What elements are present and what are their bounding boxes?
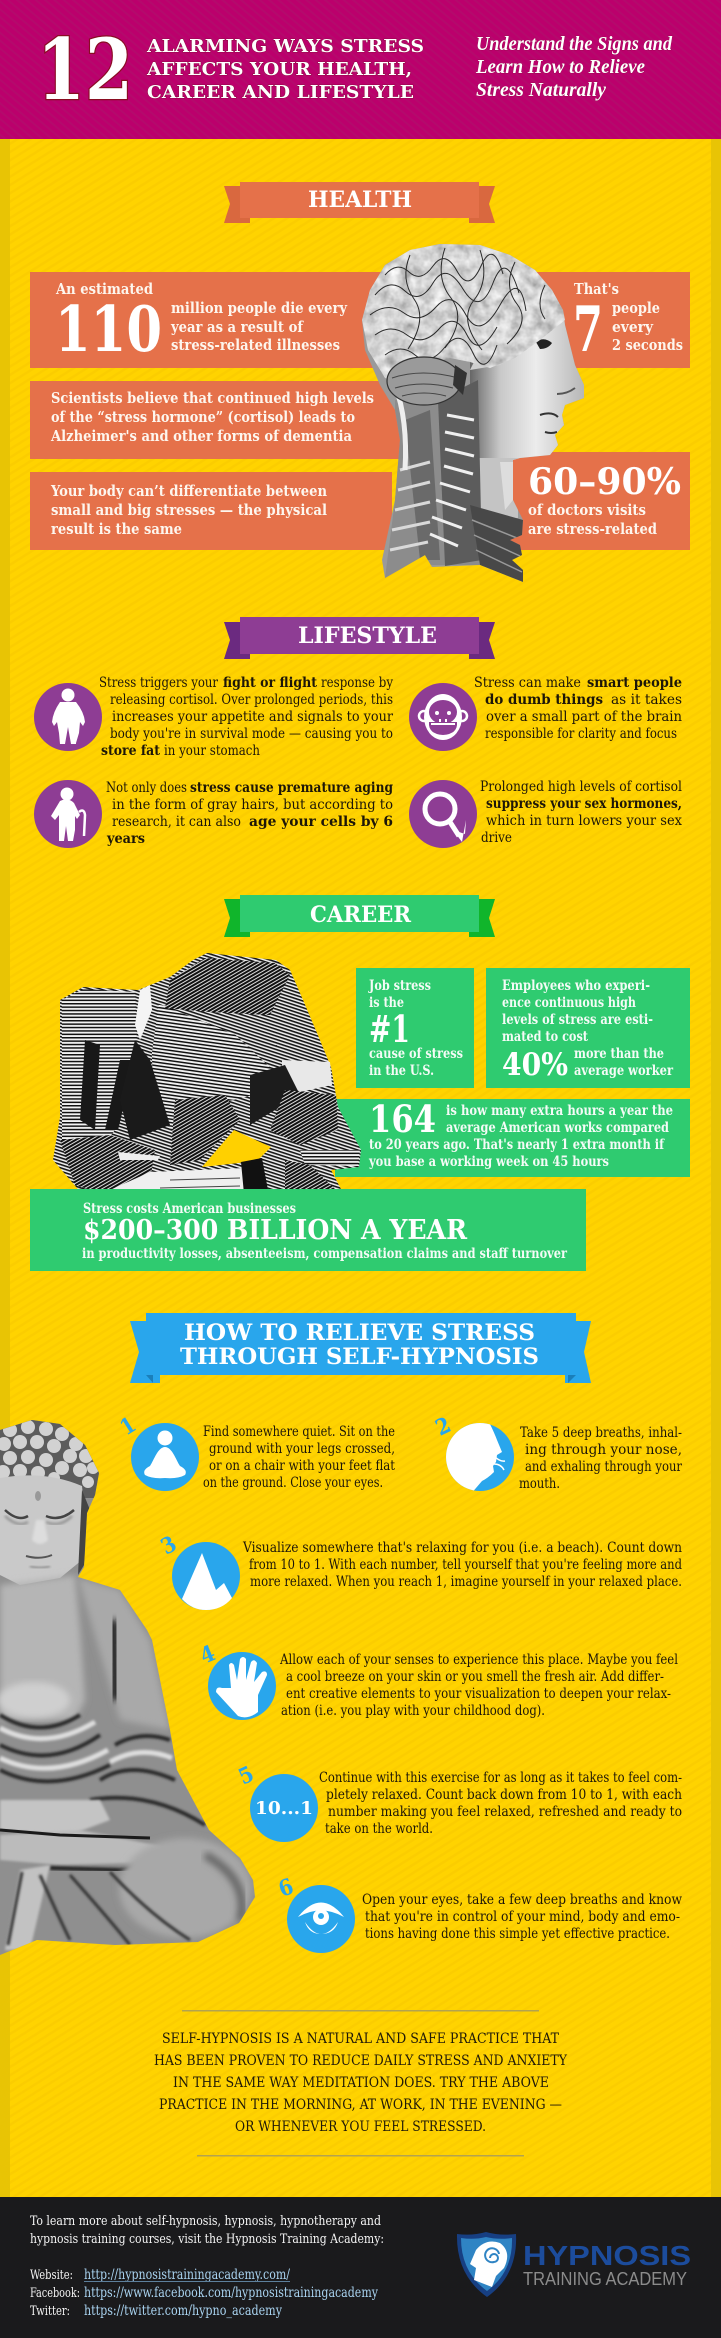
text: pletely relaxed. Count back down from 10 to 1, with each (326, 1787, 682, 1803)
stat: 40%: more than the (574, 1046, 664, 1062)
text: fight or flight: releasing cortisol. Over prolonged periods, this (110, 692, 393, 708)
text: fight or flight: body you're in survival mode — causing you to (110, 726, 393, 742)
stat: 110 million: 110 (55, 292, 162, 366)
title text: CAREER AND LIFESTYLE (147, 82, 414, 103)
icon: countdown: 10...1 (255, 1798, 313, 1819)
text: more relaxed. When you reach 1, imagine yourself in your relaxed place. (250, 1574, 682, 1590)
panel: career stats upper (335, 968, 690, 1177)
text: on the ground. Close your eyes. (203, 1475, 383, 1491)
text: smart people: as it takes (611, 692, 682, 708)
text (203, 1424, 395, 1491)
text: ation (i.e. you play with your childhood dog). (281, 1703, 545, 1719)
header band (0, 0, 721, 139)
title text: ALARMING WAYS STRESS (146, 36, 424, 57)
stat: 40%: average worker (574, 1063, 674, 1079)
text: premature aging: years (106, 831, 145, 847)
panel: health stats (30, 272, 690, 550)
text: differentiate (50, 483, 328, 538)
text: alzheimer's: of the “stress hormone” (cortisol) leads to (51, 409, 355, 426)
text: ground with your legs crossed, (209, 1441, 395, 1457)
text: ing through your nose, (525, 1442, 682, 1458)
number: 2 (432, 1412, 455, 1441)
torso and robe (0, 1575, 85, 1720)
footer links: Twitter: (30, 2304, 70, 2319)
stat: 164 hours: 164 (369, 1097, 436, 1141)
text: fight or flight: store fat (101, 743, 160, 759)
text: fight or flight: response by (321, 675, 393, 691)
text: premature aging: age your cells by 6 (249, 814, 393, 830)
text: fight or flight (99, 675, 393, 759)
number: 5 (235, 1761, 258, 1790)
stat: 164 hours (368, 1097, 673, 1170)
footer links (30, 2267, 378, 2319)
footer intro text (30, 2214, 384, 2247)
title text: AFFECTS YOUR HEALTH, (146, 59, 412, 80)
text: smart people (474, 675, 682, 742)
stat: 7 people: people (612, 300, 660, 317)
ribbon: health: HEALTH (308, 187, 412, 213)
closing statement (154, 2010, 568, 2156)
stat: 7 people: 2 seconds (612, 337, 683, 354)
subtitle: Understand the Signs and (476, 33, 673, 55)
text (519, 1425, 682, 1492)
footer (0, 2197, 721, 2338)
text: ent creative elements to your visualization to deepen your relax- (286, 1686, 671, 1702)
illustration: anatomical head (360, 240, 590, 582)
stat: 40%: mated to cost (502, 1029, 588, 1045)
number: 1 (115, 1412, 141, 1441)
closing statement: IN THE SAME WAY MEDITATION DOES. TRY THE ABOVE (173, 2075, 549, 2091)
footer links: Website: (30, 2268, 73, 2283)
icon: hand (208, 1652, 276, 1720)
panel: annual cost (30, 1189, 586, 1271)
stat: 40%: 40% (502, 1047, 568, 1083)
text: smart people: do dumb things (485, 692, 603, 708)
text (279, 1652, 678, 1719)
text: fight or flight: Stress triggers your (99, 675, 218, 691)
panel: lifestyle items (34, 675, 682, 848)
title number: 12 (37, 20, 133, 119)
stat: 164 hours: is how many extra hours a year the (446, 1103, 673, 1119)
text (362, 1892, 683, 1942)
icon: meditation (131, 1423, 199, 1491)
text: number making you feel relaxed, refreshed and ready to (328, 1804, 682, 1820)
ribbon: how to relieve stress: THROUGH SELF-HYPNOSIS (180, 1344, 539, 1370)
panel: annual cost: in productivity losses, absenteeism, compensation claims and staff turnover (82, 1246, 568, 1262)
step 3 (157, 1531, 682, 1610)
stat: 110 million: stress-related illnesses (171, 337, 340, 354)
text: Find somewhere quiet. Sit on the (203, 1424, 395, 1440)
text: fight or flight: increases your appetite and signals to your (112, 709, 393, 725)
text: fight or flight: in your stomach (164, 743, 260, 759)
hair (0, 1418, 100, 1498)
text (242, 1540, 682, 1590)
ribbon: lifestyle: LIFESTYLE (298, 623, 437, 649)
panel: annual cost: Stress costs American businesses (83, 1201, 296, 1217)
closing statement: HAS BEEN PROVEN TO REDUCE DAILY STRESS AND ANXIETY (154, 2053, 568, 2069)
footer links: Facebook: (30, 2286, 80, 2301)
cerebellum (387, 357, 461, 405)
logo: hypnosis training academy: TRAINING ACADEMY (523, 2269, 687, 2289)
step 4 (197, 1640, 678, 1720)
closing statement: SELF-HYPNOSIS IS A NATURAL AND SAFE PRACTICE THAT (162, 2031, 560, 2047)
text: Allow each of your senses to experience this place. Maybe you feel (279, 1652, 678, 1668)
icon: breathing profile (446, 1423, 514, 1491)
stat: #1 cause: #1 (369, 1007, 410, 1051)
leg (119, 1838, 251, 1938)
ribbon: lifestyle (224, 617, 495, 659)
text: from 10 to 1. With each number, tell yourself that you're feeling more and (249, 1557, 682, 1573)
text: alzheimer's (50, 390, 374, 445)
stat: 40% (502, 978, 674, 1083)
illustration: stressed man at desk (53, 953, 361, 1195)
text: that you're in control of your mind, body and emo- (365, 1909, 680, 1925)
icon: mountains (172, 1542, 240, 1610)
stat: 7 people: 7 (573, 292, 603, 366)
footer intro text: To learn more about self-hypnosis, hypnosis, hypnotherapy and (30, 2214, 381, 2229)
number: 6 (275, 1873, 297, 1903)
icon: monkey (409, 683, 477, 751)
text: premature aging: in the form of gray hairs, but according to (112, 797, 393, 813)
text: sex hormones: drive (481, 830, 512, 846)
text: Continue with this exercise for as long as it takes to feel com- (319, 1770, 682, 1786)
stat: 60-90%: 60–90% (528, 461, 681, 503)
footer links: https://www.facebook.com/hypnosistrainingacademy (84, 2285, 378, 2301)
text: differentiate: result is the same (51, 521, 182, 538)
stat: 110 million: million people die every (171, 300, 347, 317)
text: alzheimer's: Scientists believe that continued high levels (51, 390, 374, 407)
step 1 (115, 1412, 395, 1491)
text: tions having done this simple yet effective practice. (365, 1926, 670, 1942)
text: premature aging: Not only does (106, 780, 187, 796)
stat: 40%: ence continuous high (502, 995, 636, 1011)
subtitle: Learn How to Relieve (475, 56, 645, 78)
stat: 40%: levels of stress are esti- (502, 1012, 653, 1028)
logo: hypnosis training academy: HYPNOSIS (523, 2240, 691, 2271)
ribbon: career: CAREER (310, 902, 412, 928)
step 2 (434, 1418, 682, 1491)
text: sex hormones: Prolonged high levels of cortisol (480, 779, 682, 795)
stat: 110 million: An estimated (55, 281, 153, 298)
step 5 (235, 1761, 682, 1842)
panel: annual cost: $200–300 BILLION A YEAR (83, 1215, 468, 1246)
text: sex hormones: suppress your sex hormones, (486, 796, 682, 812)
text: fight or flight: fight or flight (223, 675, 317, 691)
logo: hypnosis training academy (457, 2232, 691, 2297)
stat: 40%: Employees who experi- (502, 978, 650, 994)
text: and exhaling through your (525, 1459, 682, 1475)
text: Visualize somewhere that's relaxing for you (i.e. a beach). Count down (242, 1540, 682, 1556)
stat: 7 people (573, 281, 683, 366)
text: a cool breeze on your skin or you smell the fresh air. Add differ- (286, 1669, 664, 1685)
text: Open your eyes, take a few deep breaths and know (362, 1892, 683, 1908)
step 6 (275, 1873, 683, 1953)
text: sex hormones: which in turn lowers your sex (486, 813, 682, 829)
text: differentiate: Your body can’t differentiate between (50, 483, 328, 500)
text (319, 1770, 682, 1837)
stat: #1 cause: cause of stress (369, 1046, 463, 1062)
text: mouth. (519, 1476, 560, 1492)
footer links: https://twitter.com/hypno_academy (84, 2303, 282, 2319)
text: differentiate: small and big stresses — the physical (51, 502, 327, 519)
stat: 7 people: That's (574, 281, 619, 298)
text: premature aging: stress cause premature aging (190, 780, 394, 796)
stat: #1 cause (368, 978, 463, 1079)
subtitle (475, 33, 673, 101)
stat: 60-90%: of doctors visits (528, 502, 646, 519)
text: smart people: over a small part of the brain (486, 709, 682, 725)
stat: #1 cause: in the U.S. (369, 1063, 434, 1079)
icon: hormone symbol (409, 780, 477, 848)
icon: countdown (250, 1774, 318, 1842)
gap under arm (202, 1130, 271, 1167)
text: take on the world. (325, 1821, 433, 1837)
stat: #1 cause: is the (369, 995, 404, 1011)
footer links: http://hypnosistrainingacademy.com/ (84, 2267, 291, 2283)
icon: overweight figure (34, 683, 102, 751)
text: smart people: responsible for clarity and focus (485, 726, 677, 742)
title text (146, 36, 424, 103)
closing statement: OR WHENEVER YOU FEEL STRESSED. (235, 2119, 486, 2135)
stat: 164 hours: to 20 years ago. That's nearly 1 extra month if (369, 1137, 665, 1153)
subtitle: Stress Naturally (476, 79, 606, 101)
number: 4 (197, 1640, 219, 1670)
text: or on a chair with your feet flat (209, 1458, 395, 1474)
stat: 110 million: year as a result of (170, 319, 304, 336)
desk and mug (85, 1168, 245, 1195)
stat: 60-90% (528, 461, 681, 538)
illustration: buddha statue (0, 1418, 255, 1955)
text: smart people: Stress can make (474, 675, 581, 691)
stat: 164 hours: you base a working week on 45 hours (368, 1154, 609, 1170)
text: sex hormones (480, 779, 682, 846)
face (0, 1475, 85, 1585)
icon: eye (287, 1885, 355, 1953)
ribbon: career (224, 895, 495, 937)
ribbon: how to relieve stress (130, 1313, 591, 1383)
stat: 60-90%: are stress-related (528, 521, 657, 538)
icon: elderly figure with cane (34, 780, 102, 848)
stat: 110 million (55, 281, 347, 366)
stat: 164 hours: average American works compared (446, 1120, 669, 1136)
footer intro text: hypnosis training courses, visit the Hypnosis Training Academy: (30, 2232, 384, 2247)
number: 3 (157, 1531, 181, 1560)
text: smart people: smart people (587, 675, 682, 691)
ribbon: health (224, 182, 495, 223)
text: alzheimer's: Alzheimer's and other forms of dementia (50, 428, 353, 445)
closing statement: PRACTICE IN THE MORNING, AT WORK, IN THE EVENING — (159, 2097, 562, 2113)
ribbon: how to relieve stress: HOW TO RELIEVE STRESS (184, 1320, 535, 1346)
text: premature aging (106, 780, 394, 847)
stat: #1 cause: Job stress (368, 978, 431, 994)
text: Take 5 deep breaths, inhal- (520, 1425, 682, 1441)
stat: 7 people: every (612, 319, 653, 336)
text: premature aging: research, it can also (112, 814, 241, 830)
hands (0, 1800, 110, 1835)
